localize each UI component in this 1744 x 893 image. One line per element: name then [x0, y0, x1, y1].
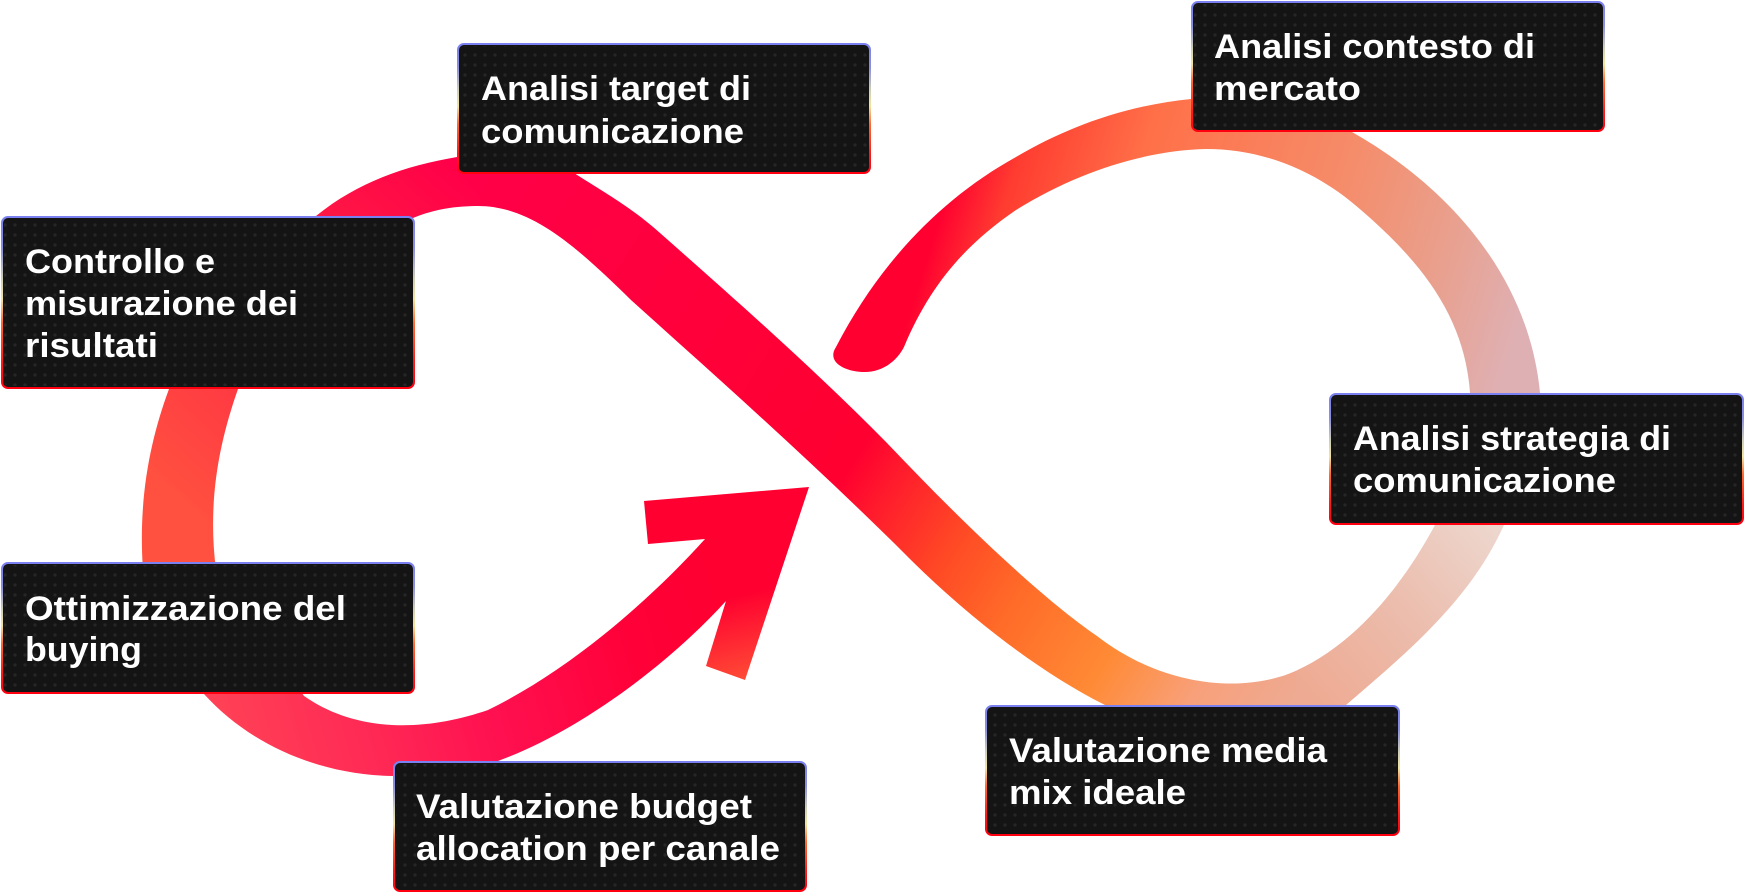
- box: Valutazione media mix ideale: mix ideale: [1009, 774, 1186, 812]
- arrow head: [644, 487, 809, 680]
- box: Valutazione media mix ideale: Valutazione media: [1009, 732, 1328, 770]
- box: Analisi contesto di mercato: [1192, 2, 1604, 131]
- ribbon: left loop upper arc: [142, 155, 480, 570]
- box: Valutazione budget allocation per canale: [394, 762, 806, 891]
- box: Analisi contesto di mercato: mercato: [1214, 70, 1361, 108]
- box: Analisi strategia di comunicazione: Analisi strategia di: [1353, 420, 1671, 458]
- box: Controllo e misurazione dei risultati: [2, 217, 414, 388]
- box: Controllo e misurazione dei risultati: misurazione dei: [25, 285, 298, 323]
- ribbon: left loop lower arc: [185, 530, 735, 776]
- box: Ottimizzazione del buying: [2, 563, 414, 693]
- box: Analisi contesto di mercato: Analisi contesto di: [1214, 28, 1535, 66]
- ribbon: central diagonal: [470, 150, 1296, 725]
- box: Ottimizzazione del buying: buying: [25, 631, 142, 669]
- box: Valutazione media mix ideale: [986, 706, 1399, 835]
- box: Valutazione budget allocation per canale: allocation per canale: [416, 830, 780, 868]
- box: Valutazione budget allocation per canale: Valutazione budget: [416, 788, 752, 826]
- box: Ottimizzazione del buying: Ottimizzazione del: [25, 590, 346, 628]
- box: Analisi target di comunicazione: comunicazione: [481, 113, 744, 151]
- box: Analisi strategia di comunicazione: comunicazione: [1353, 462, 1616, 500]
- box: Analisi target di comunicazione: [458, 44, 870, 173]
- box: Analisi target di comunicazione: Analisi target di: [481, 70, 751, 108]
- box: Controllo e misurazione dei risultati: Controllo e: [25, 243, 215, 281]
- ribbon: right loop lower arc: [1286, 505, 1512, 725]
- ribbon: right loop upper arc: [833, 97, 1541, 420]
- box: Controllo e misurazione dei risultati: risultati: [25, 327, 158, 365]
- box: Analisi strategia di comunicazione: [1330, 394, 1743, 524]
